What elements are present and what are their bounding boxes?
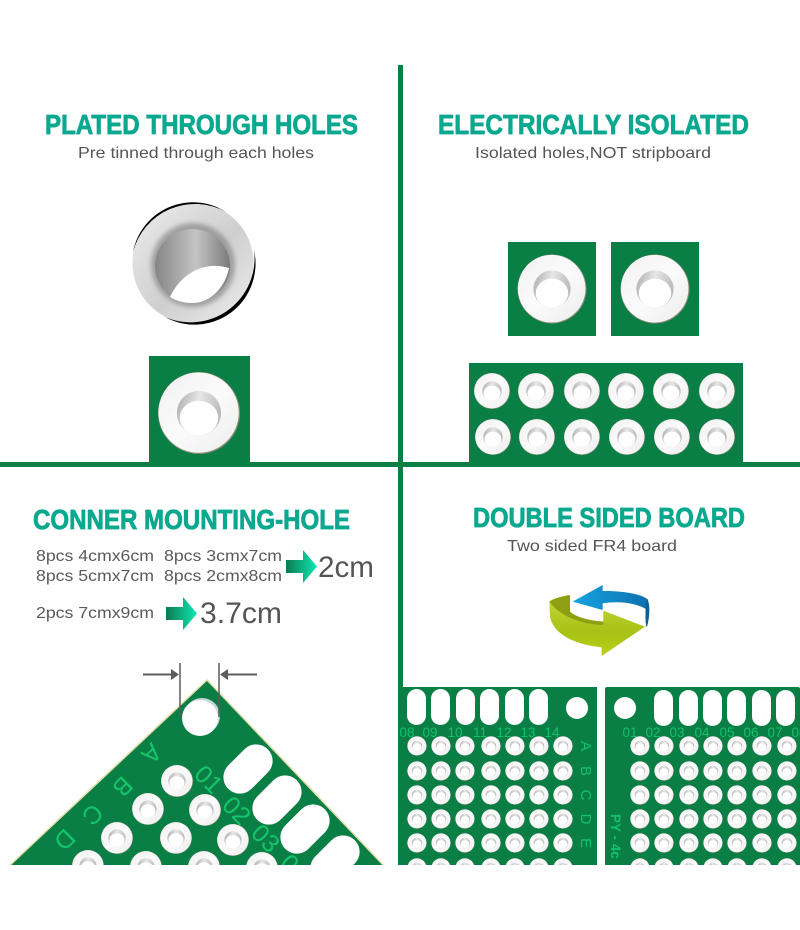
vertical divider <box>398 65 403 865</box>
column numbers: 02 <box>645 725 661 740</box>
row letters: B <box>577 766 594 776</box>
row letters: C <box>577 790 594 801</box>
text block: board sizes: 8pcs 5cmx7cm <box>36 568 154 585</box>
column numbers <box>400 728 560 737</box>
column numbers: 11 <box>473 725 487 740</box>
column numbers: 07 <box>767 725 783 740</box>
slots <box>223 744 360 865</box>
value: 2cm: 2cm <box>318 551 374 584</box>
subheading: isolated holes: Isolated holes,NOT stripboard <box>475 145 711 162</box>
column numbers: 13 <box>520 725 536 740</box>
panel: electrically isolated <box>438 109 749 464</box>
column numbers: 01 <box>189 760 228 799</box>
row letters: B <box>106 770 138 802</box>
row letters: A <box>135 737 167 769</box>
column numbers: 04 <box>275 849 314 889</box>
pads <box>72 765 278 865</box>
panel: double sided board <box>399 502 800 878</box>
text block: board sizes: 2pcs 7cmx9cm <box>36 605 154 622</box>
board: rotated corner <box>9 679 384 865</box>
row letters: D <box>577 814 594 825</box>
column numbers: 08 <box>399 725 415 740</box>
arrow: to 2cm <box>286 550 317 583</box>
row letters: D <box>48 823 81 856</box>
column numbers: 10 <box>447 725 463 740</box>
subheading: two sided: Two sided FR4 board <box>507 538 677 555</box>
board: left isolated pad <box>508 242 596 336</box>
board: right side <box>605 687 800 878</box>
text block: board sizes: 8pcs 2cmx8cm <box>164 568 282 585</box>
pads <box>407 736 573 878</box>
column numbers: 12 <box>496 725 512 740</box>
column numbers <box>623 728 800 737</box>
horizontal divider <box>0 462 800 467</box>
dimension arrows <box>143 663 257 717</box>
slots <box>614 690 795 726</box>
text block: board sizes: 8pcs 3cmx7cm <box>164 548 282 565</box>
row letters <box>56 742 159 848</box>
slots <box>407 689 588 725</box>
heading: double sided board: DOUBLE SIDED BOARD <box>473 502 745 533</box>
pads <box>630 736 797 878</box>
column numbers: 03 <box>669 725 685 740</box>
board: single pad square <box>149 356 250 464</box>
column numbers: 14 <box>544 725 560 740</box>
text block: board sizes <box>36 548 282 622</box>
subheading: pre tinned: Pre tinned through each holes <box>78 145 314 162</box>
row letters: E <box>577 838 594 848</box>
row letters: C <box>76 798 109 831</box>
heading: plated through holes: PLATED THROUGH HOLES <box>45 109 358 140</box>
heading: conner mounting-hole: CONNER MOUNTING-HOLE <box>33 504 350 535</box>
board: strip of isolated pads <box>469 363 743 464</box>
column numbers: 09 <box>422 725 438 740</box>
heading: electrically isolated: ELECTRICALLY ISOLATED <box>438 109 749 140</box>
column numbers: 05 <box>719 725 735 740</box>
row letters <box>581 741 591 848</box>
board: right isolated pad <box>611 242 699 336</box>
icon: large plated ring <box>132 202 256 325</box>
row letters: A <box>577 741 594 751</box>
panel: corner mounting hole <box>7 504 386 891</box>
icon: circular flip arrows <box>549 585 649 656</box>
column numbers: 01 <box>622 725 638 740</box>
column numbers: 02 <box>217 791 256 830</box>
panel: plated through holes <box>45 109 358 464</box>
board code: PY - 4c <box>608 814 623 859</box>
text block: board sizes: 8pcs 4cmx6cm <box>36 548 154 565</box>
value: 3.7cm: 3.7cm <box>200 597 282 630</box>
board: left side <box>399 687 597 878</box>
column numbers: 04 <box>694 725 710 740</box>
column numbers: 06 <box>743 725 759 740</box>
column numbers: 03 <box>246 819 285 858</box>
arrow: to 3.7cm <box>166 597 197 630</box>
column numbers <box>196 766 298 865</box>
